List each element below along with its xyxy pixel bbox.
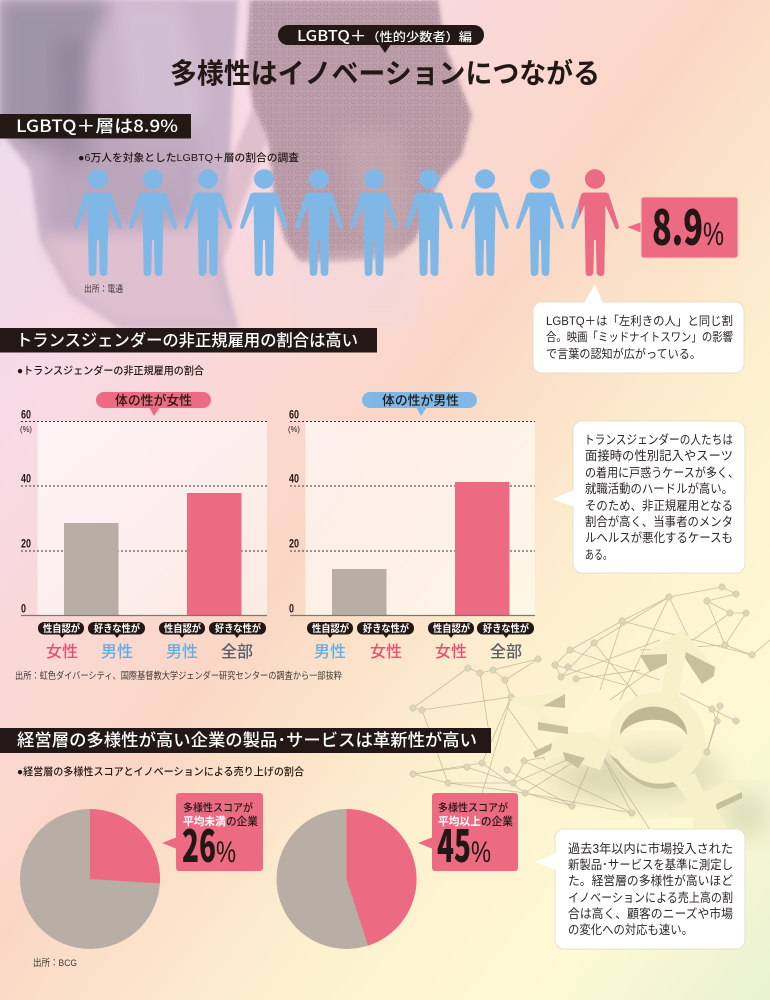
category labels: 性自認が: [43, 622, 80, 635]
callout: transgender hurdles: ルヘルスが悪化するケースも: [585, 530, 733, 545]
axis labels: 0: [289, 602, 294, 616]
header pill: male: [362, 392, 477, 416]
axis labels: 0: [21, 602, 26, 616]
category pill: [278, 25, 484, 53]
pie chart: above average 45%: [276, 809, 417, 949]
callout: innovation revenue: 合は高く、顧客のニーズや市場: [568, 906, 733, 921]
section 3 heading: 経営層の多様性が高い企業の製品･サービスは革新性が高い: [17, 730, 477, 750]
callout: 26%: %: [216, 836, 236, 869]
axis labels: [20, 408, 32, 616]
bottom cross: [665, 773, 742, 829]
category labels: [38, 622, 266, 661]
category labels: 女性: [370, 643, 402, 661]
callout: innovation revenue: 過去3年以内に市場投入された: [568, 841, 733, 856]
male arrow: [640, 630, 715, 697]
axis labels: 40: [289, 472, 299, 486]
source: BCG: 出所：BCG: [33, 957, 77, 969]
axis labels: [288, 408, 300, 616]
callout: transgender hurdles: 面接時の性別記入やスーツ: [585, 448, 733, 463]
callout: 8.9%: %: [703, 216, 724, 252]
axis labels: 60: [21, 408, 31, 422]
background network and gender symbol: [410, 584, 770, 837]
bars: [64, 493, 242, 615]
axis labels: 20: [289, 536, 299, 550]
section 1 heading: LGBTQ＋層は8.9%: [16, 112, 178, 137]
category labels: 好きな性が: [483, 622, 529, 635]
callout: 26%: 26: [182, 811, 216, 875]
section 2 heading: [0, 328, 377, 352]
callout: innovation revenue: イノベーションによる売上高の割: [568, 890, 733, 905]
category labels: 性自認が: [433, 622, 470, 635]
callout: innovation revenue: 新製品･サービスを基準に測定し: [568, 857, 733, 872]
section 1: LGBTQ+ share: [0, 112, 744, 373]
callout: transgender hurdles: の着用に戸惑うケースが多く、: [585, 465, 739, 480]
category labels: 男性: [101, 643, 133, 661]
pictogram row: [74, 169, 619, 276]
callout: 45%: 平均以上の企業: [438, 814, 513, 828]
callout: left-handed comparison: LGBTQ＋は「左利きの人」と同じ割: [546, 313, 733, 328]
axis labels: 60: [289, 408, 299, 422]
callout: left-handed comparison: 合。映画「ミッドナイトスワン」の影響: [546, 330, 733, 344]
callout: transgender hurdles: そのため、非正規雇用となる: [585, 498, 733, 513]
source: Dentsu: 出所：電通: [84, 283, 123, 294]
axis labels: (%): [288, 425, 300, 434]
callout: innovation revenue: [535, 829, 745, 949]
section 1 subtitle: ●6万人を対象としたLGBTQ＋層の割合の調査: [78, 151, 300, 164]
section 2 subtitle: ●トランスジェンダーの非正規雇用の割合: [17, 364, 204, 377]
callout: innovation revenue: た。経営層の多様性が高いほど: [568, 873, 733, 888]
chart panel: [38, 421, 267, 615]
section 2: transgender employment: [0, 328, 745, 682]
bars: [332, 482, 510, 615]
axis labels: 20: [21, 536, 31, 550]
category labels: 全部: [221, 643, 253, 661]
category labels: 男性: [166, 643, 198, 661]
callout: transgender hurdles: ある。: [585, 548, 612, 562]
header pill: male: 体の性が男性: [382, 393, 459, 408]
category labels: 性自認が: [164, 622, 201, 635]
callout: 26%: [162, 793, 263, 875]
chart panel: [306, 421, 535, 615]
category labels: [307, 622, 534, 661]
callout: 26%: 平均未満の企業: [183, 814, 258, 828]
callout: 8.9%: [627, 189, 738, 259]
callout: transgender hurdles: トランスジェンダーの人たちは: [584, 432, 733, 447]
section 3: management diversity: [0, 728, 745, 969]
callout: 8.9%: 8.9: [652, 189, 703, 259]
axis labels: 40: [21, 472, 31, 486]
header pill: female: [96, 392, 211, 416]
category labels: 性自認が: [312, 622, 349, 635]
title block: [170, 25, 600, 89]
header pill: female: 体の性が女性: [115, 393, 192, 408]
chart: body sex female: [20, 392, 267, 661]
callout: 45%: 多様性スコアが: [438, 801, 508, 814]
category labels: 男性: [314, 643, 346, 661]
callout: innovation revenue: の変化への対応も速い。: [568, 922, 693, 937]
category labels: 全部: [490, 643, 522, 661]
callout: transgender hurdles: [552, 421, 745, 573]
category pill: LGBTQ＋ （性的少数者）編: [297, 25, 472, 46]
pie chart: below average 26%: [20, 809, 160, 949]
left cross: [510, 693, 610, 770]
callout: left-handed comparison: で言葉の認知が広がっている。: [546, 346, 701, 361]
callout: transgender hurdles: 就職活動のハードルが高い。: [585, 481, 733, 496]
source: Nijiiro Diversity: 出所：虹色ダイバーシティ、国際基督教大学ジェンダー研究センターの調査から一部抜粋: [15, 670, 342, 682]
callout: transgender hurdles: 割合が高く、当事者のメンタ: [585, 514, 733, 529]
category labels: 好きな性が: [215, 622, 261, 635]
background photo: two people holding hands: [0, 0, 472, 328]
section 3 subtitle: ●経営層の多様性スコアとイノベーションによる売り上げの割合: [17, 765, 304, 778]
callout: left-handed comparison: [533, 284, 744, 373]
callout: 45%: 45: [437, 811, 471, 875]
main title: 多様性はイノベーションにつながる: [170, 57, 600, 89]
callout: 45%: [418, 793, 518, 875]
callout: 26%: 多様性スコアが: [183, 801, 253, 814]
category labels: 好きな性が: [363, 622, 409, 635]
category labels: 女性: [46, 643, 78, 661]
chart: body sex male: [288, 392, 535, 661]
callout: 45%: %: [471, 836, 491, 869]
section 3 heading: [0, 728, 491, 753]
axis labels: (%): [20, 425, 32, 434]
section 2 heading: トランスジェンダーの非正規雇用の割合は高い: [16, 330, 358, 350]
category labels: 好きな性が: [94, 622, 140, 635]
ring: [609, 692, 705, 787]
category labels: 女性: [435, 643, 467, 661]
